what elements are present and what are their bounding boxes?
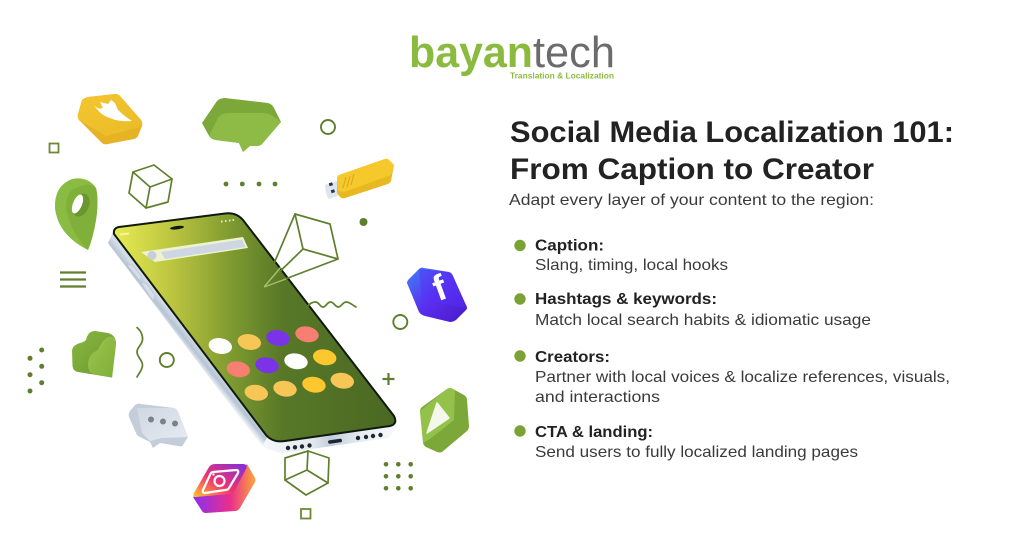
outline square bottom: [301, 509, 310, 518]
squiggle right of phone: [307, 302, 356, 307]
item: CTA and landing: CTA & landing:: [535, 424, 653, 441]
icon: facebook badge: [407, 266, 467, 322]
dot grid bottom right: [384, 462, 413, 491]
item: hashtags and keywords: Match local search habits & idiomatic usage: [535, 312, 871, 329]
decorative outline square top-left: [50, 144, 58, 152]
item: creators: [514, 349, 950, 406]
outline circle top: [321, 120, 335, 134]
outline circle right: [393, 315, 407, 329]
side buttons: [127, 264, 142, 281]
icon: wireframe cube top: [129, 165, 172, 208]
icon: green map pin: [55, 178, 98, 250]
icon: yellow usb stick: [325, 159, 394, 199]
icon: yellow twitter badge: [78, 94, 142, 144]
logo: bayantech: bayan: [409, 28, 533, 77]
subtitle: Adapt every layer of your content to the region:: [509, 192, 874, 209]
icon: instagram badge: [193, 464, 256, 513]
item: caption: [514, 238, 728, 274]
phone screen: [114, 213, 395, 441]
icon: phone: [108, 213, 395, 453]
item: CTA and landing: Send users to fully localized landing pages: [535, 444, 858, 461]
app dots: [207, 325, 355, 402]
icon: green speech bubble: [202, 98, 281, 152]
icon: grey chat bubble: [129, 404, 188, 448]
item: creators: and interactions: [535, 389, 660, 406]
title: [510, 116, 954, 186]
logo: bayantech: Translation & Localization: [510, 70, 614, 80]
item: hashtags and keywords: [514, 291, 871, 329]
kite tail overlay: [264, 267, 286, 287]
logo: bayantech: tech: [533, 28, 615, 77]
dots left: [28, 348, 44, 394]
phone body: [108, 232, 300, 453]
title: From Caption to Creator: [510, 153, 875, 186]
vertical squiggle: [137, 328, 143, 377]
outline circle left: [160, 353, 174, 367]
item: caption: Caption:: [535, 238, 604, 254]
item: CTA and landing: [514, 424, 858, 461]
icon: wireframe kite: [264, 214, 338, 287]
icon: menu lines: [60, 272, 86, 286]
three dots top: [224, 182, 277, 186]
item: hashtags and keywords: Hashtags & keywords:: [535, 291, 717, 308]
icon: green heart: [72, 331, 116, 378]
icon: facebook badge: f: [427, 266, 453, 309]
item: creators: Partner with local voices & localize references, visuals,: [535, 369, 950, 386]
item: caption: Slang, timing, local hooks: [535, 257, 728, 274]
icon: wireframe cube bottom: [285, 451, 329, 495]
ports: [286, 433, 383, 450]
notch: [170, 225, 184, 230]
item: creators: Creators:: [535, 349, 610, 366]
green dot: [360, 218, 368, 226]
search bar: [141, 237, 248, 262]
logo: bayantech: [409, 28, 615, 80]
status marks: [221, 220, 234, 222]
title: Social Media Localization 101:: [510, 116, 954, 149]
plus sign: [382, 373, 394, 385]
icon: green play badge: [420, 388, 469, 452]
